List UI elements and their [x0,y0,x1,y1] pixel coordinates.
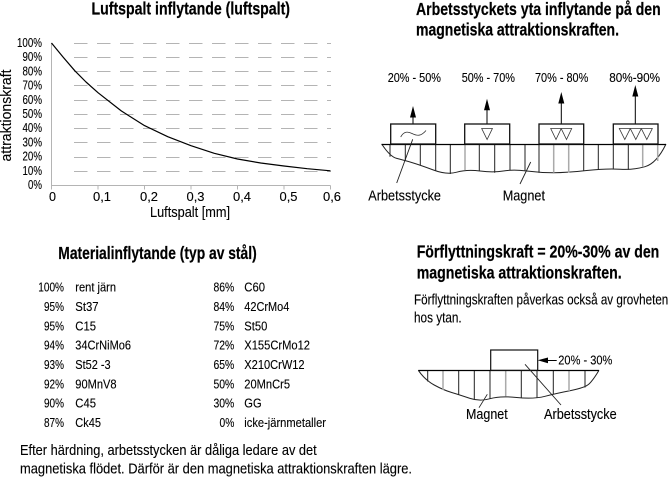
arrows [410,85,638,124]
right column: icke-järnmetaller [244,415,327,430]
workpieces with surface profiles [391,124,658,144]
heading: displacement force [417,242,659,282]
right column: 86% [214,280,235,295]
y axis tick labels: 10% [22,163,42,178]
right column: X155CrMo12 [244,338,310,353]
heading: surface influence [416,0,661,40]
text block: hardening note: magnetiska flödet. Därför är den magnetiska attraktionskraften lägre. [20,461,412,477]
line chart: attraction force vs air gap [0,35,341,221]
diagram: workpiece surface roughness [368,70,666,205]
left column: St37 [75,299,99,314]
label: magnet: Magnet [503,188,546,205]
y axis tick labels: 0% [28,177,42,192]
y axis tick labels: 70% [22,78,42,93]
x axis label: Luftspalt [mm] [150,204,230,221]
x axis tick labels: 0,4 [233,189,251,204]
table: material percentages [38,280,327,430]
left column: 90% [44,396,64,411]
leader lines [397,139,531,184]
label: 20% - 30%: 20% - 30% [558,352,613,367]
left column: C45 [75,396,96,411]
right column: 50% [214,376,235,391]
left column: 34CrNiMo6 [75,338,131,353]
left column: C15 [75,318,96,333]
text block: hardening note: Efter härdning, arbetsstycken är dåliga ledare av det [20,443,317,459]
magnet [382,144,666,174]
right column: C60 [244,280,265,295]
y axis tick labels: 20% [22,149,42,164]
label: workpiece: Arbetsstycke [368,188,441,205]
percent labels: 70% - 80% [535,70,589,85]
x axis tick labels [49,189,341,204]
y axis tick labels: 60% [22,92,42,107]
left column: 95% [44,299,64,314]
x axis tick labels: 0,3 [186,189,204,204]
percent labels: 20% - 50% [388,70,441,85]
right column: St50 [244,318,267,333]
heading: material influence: Materialinflytande (typ av stål) [58,243,257,263]
right column: 72% [214,338,235,353]
y axis tick labels [17,35,42,192]
label: workpiece: Arbetsstycke [544,406,617,423]
leader lines [479,364,561,408]
arrow: displacement force [538,358,557,363]
left column: 94% [44,338,64,353]
left column: rent järn [75,280,116,295]
right column [214,280,327,430]
workpiece [491,350,538,370]
right column: 42CrMo4 [244,299,289,314]
surface symbols [401,128,652,140]
right column: X210CrW12 [244,357,305,372]
y axis tick labels: 100% [17,35,42,50]
y axis tick labels: 50% [22,106,42,121]
text block: displacement note [414,292,668,326]
y axis tick labels: 80% [22,63,42,78]
x axis tick labels: 0,5 [280,189,298,204]
right column: 0% [220,415,235,430]
x axis tick labels: 0,6 [323,189,341,204]
percent labels [388,70,660,85]
left column [38,280,131,430]
heading: surface influence: magnetiska attraktionskraften. [416,20,619,40]
curve [52,43,330,171]
right column: 75% [214,318,235,333]
y axis tick labels: 90% [22,49,42,64]
x axis tick labels: 0 [49,189,56,204]
left column: 93% [44,357,64,372]
x axis tick labels: 0,1 [93,189,111,204]
left column: 95% [44,318,64,333]
left column: 100% [38,280,64,295]
right column: 65% [214,357,235,372]
left column: 87% [44,415,64,430]
y axis tick labels: 30% [22,134,42,149]
percent labels: 80%-90% [609,70,660,85]
percent labels: 50% - 70% [462,70,515,85]
label: magnet: Magnet [466,406,508,423]
text block: hardening note [20,443,412,477]
right column: GG [244,396,262,411]
right column: 30% [214,396,235,411]
left column: 92% [44,376,64,391]
y axis tick labels: 40% [22,120,42,135]
left column: St52 -3 [75,357,111,372]
left column: 90MnV8 [75,376,117,391]
left column: Ck45 [75,415,101,430]
magnet [418,370,599,400]
right column: 84% [214,299,235,314]
heading: displacement force: magnetiska attraktionskraften. [417,262,622,282]
text block: displacement note: hos ytan. [414,310,462,326]
right column: 20MnCr5 [244,376,290,391]
diagram: displacement force on magnet [418,350,617,423]
x axis tick labels: 0,2 [140,189,158,204]
